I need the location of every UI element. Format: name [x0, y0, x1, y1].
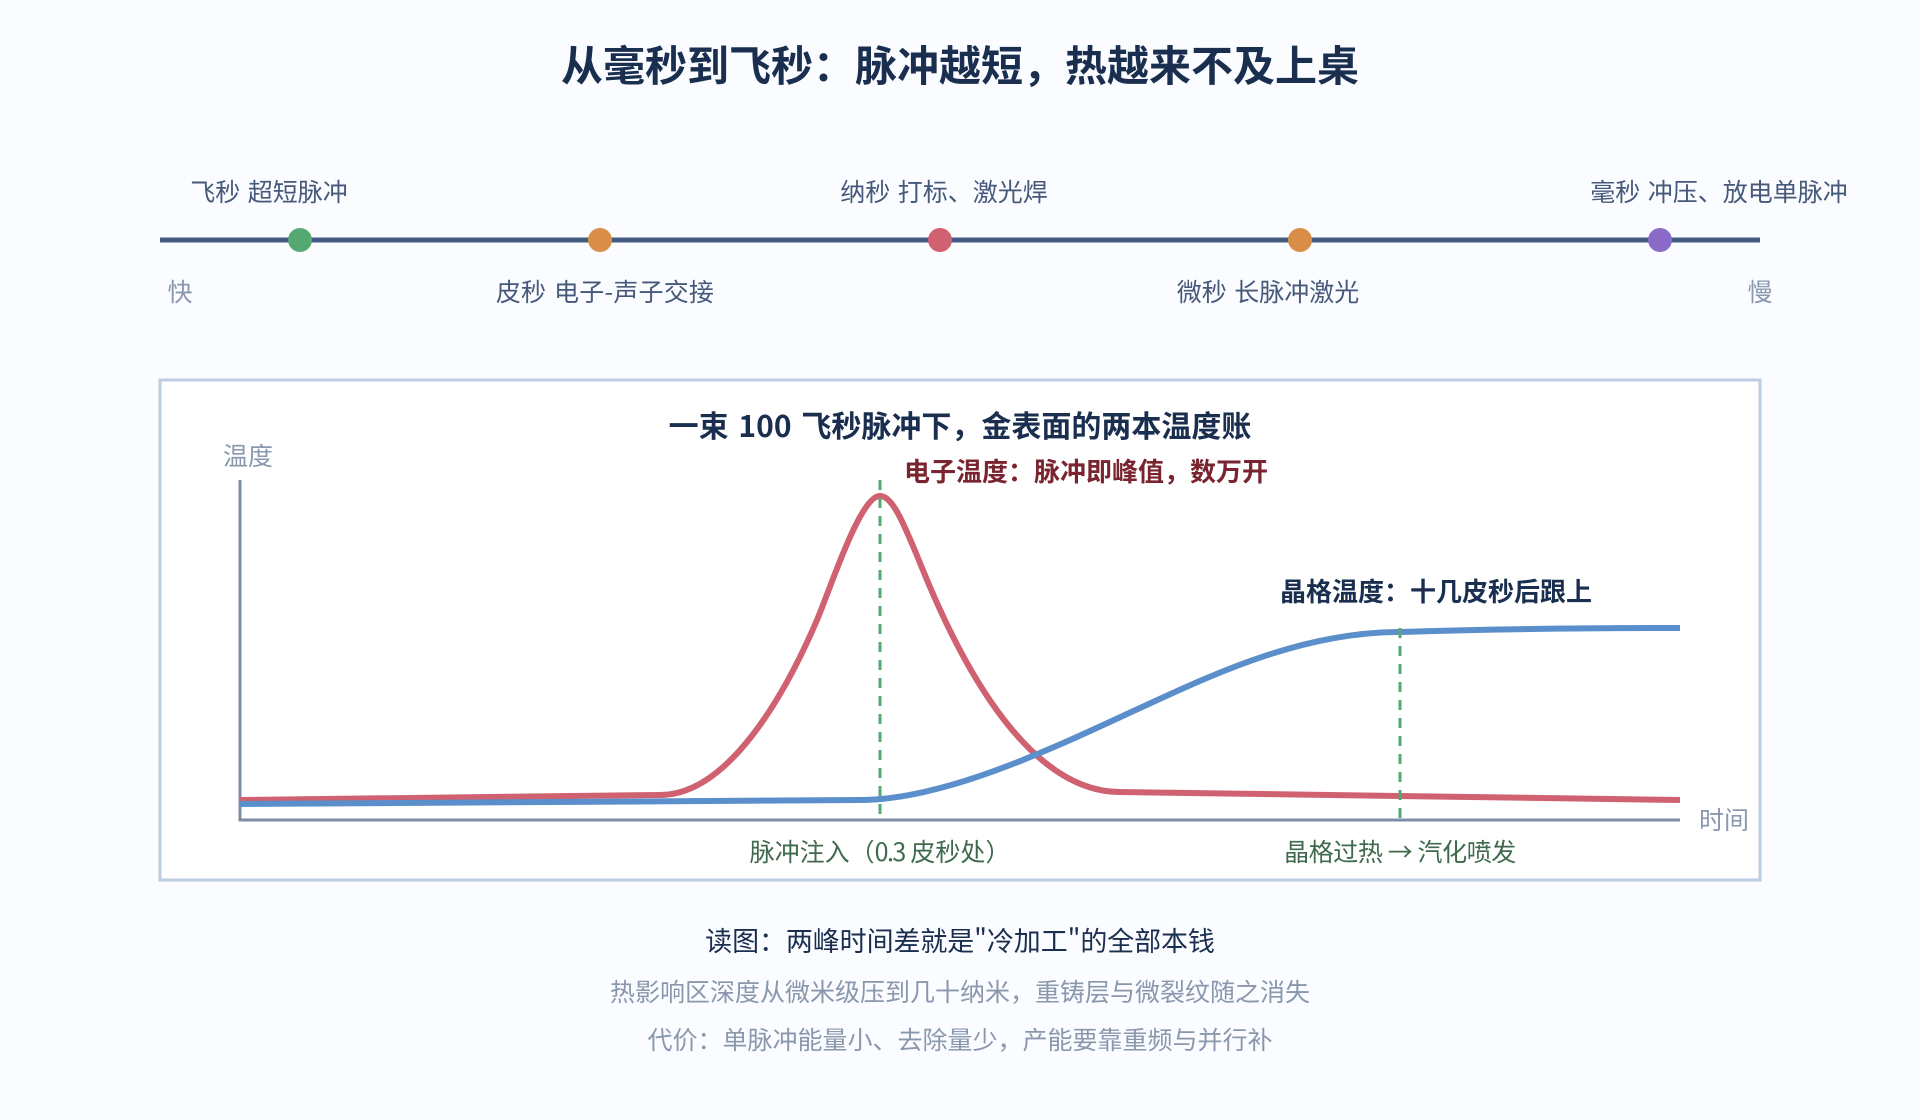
takeaway headline: 读图：两峰时间差就是"冷加工"的全部本钱 [705, 920, 1215, 959]
label: slow end: 慢 [1747, 273, 1773, 309]
marker: pulse injection dashed line [878, 480, 882, 820]
annotation: pulse injection: 脉冲注入（0.3 皮秒处） [750, 833, 1010, 869]
marker: femtosecond [288, 228, 312, 252]
title: 从毫秒到飞秒：脉冲越短，热越来不及上桌 [561, 33, 1359, 94]
timeline: pulse duration from fast to slow [160, 173, 1848, 309]
marker: microsecond [1288, 228, 1312, 252]
label: nanosecond: 纳秒 打标、激光焊 [840, 173, 1048, 209]
panel frame [160, 380, 1760, 880]
panel: two-temperature chart [160, 380, 1760, 880]
takeaway text block [610, 920, 1310, 1057]
curve: electron temperature [240, 496, 1680, 800]
label: fast end: 快 [167, 273, 193, 309]
takeaway cost: 代价：单脉冲能量小、去除量少，产能要靠重频与并行补 [647, 1021, 1273, 1057]
label: millisecond: 毫秒 冲压、放电单脉冲 [1590, 173, 1848, 209]
label: femtosecond: 飞秒 超短脉冲 [190, 173, 348, 209]
label: microsecond: 微秒 长脉冲激光 [1177, 273, 1359, 309]
timeline axis [160, 238, 1760, 242]
marker: nanosecond [928, 228, 952, 252]
label: picosecond: 皮秒 电子-声子交接 [496, 273, 714, 309]
marker: picosecond [588, 228, 612, 252]
marker: millisecond [1648, 228, 1672, 252]
chart title: 一束 100 飞秒脉冲下，金表面的两本温度账 [669, 402, 1251, 446]
curve: lattice temperature [240, 628, 1680, 804]
annotation: lattice temperature: 晶格温度：十几皮秒后跟上 [1280, 572, 1592, 609]
marker: lattice overheat dashed line [1398, 628, 1402, 820]
y axis label: 温度 [223, 437, 273, 473]
axes [240, 480, 1680, 820]
annotation: electron temperature: 电子温度：脉冲即峰值，数万开 [904, 452, 1268, 489]
x axis label: 时间 [1699, 801, 1749, 837]
takeaway detail: 热影响区深度从微米级压到几十纳米，重铸层与微裂纹随之消失 [610, 973, 1310, 1009]
annotation: overheat and vaporisation: 晶格过热 → 汽化喷发 [1284, 833, 1516, 869]
